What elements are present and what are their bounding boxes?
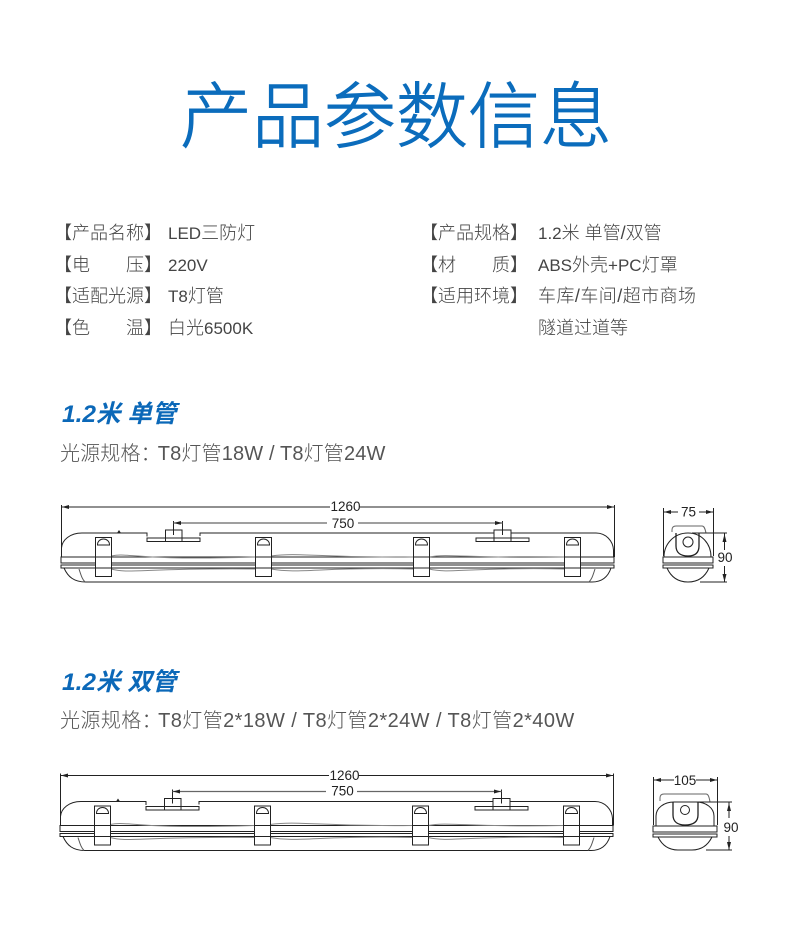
spec: environment continued: 隧道过道等 bbox=[538, 318, 628, 338]
text: double tube light source: 光源规格：T8灯管2*18W / T8灯管2*24W / T8灯管2*40W bbox=[60, 710, 575, 732]
spec: product size: 【产品规格】 1.2米 单管/双管 bbox=[420, 223, 662, 243]
heading: double tube: 1.2米 双管 bbox=[62, 669, 176, 696]
label: height 90: 90 bbox=[723, 820, 739, 835]
label: height 90: 90 bbox=[717, 550, 733, 565]
spec list: right column bbox=[420, 223, 697, 338]
label: mount spacing 750: 750 bbox=[331, 784, 354, 798]
title: 产品参数信息 bbox=[180, 78, 612, 158]
spec: environment: 【适用环境】 车库/车间/超市商场 bbox=[420, 286, 697, 306]
drawing: single tube front view bbox=[61, 499, 614, 582]
label: width 105: 105 bbox=[674, 773, 696, 788]
label: length 1260: 1260 bbox=[329, 768, 360, 783]
label: width 75: 75 bbox=[681, 504, 696, 520]
spec list: left column bbox=[54, 223, 255, 338]
text: single tube light source: 光源规格：T8灯管18W / T8灯管24W bbox=[60, 443, 386, 465]
heading: single tube: 1.2米 单管 bbox=[62, 401, 176, 428]
spec: voltage: 【电 压】 220V bbox=[54, 255, 208, 275]
label: length 1260: 1260 bbox=[330, 499, 361, 514]
spec: light source: 【适配光源】 T8灯管 bbox=[54, 286, 224, 306]
drawing: single tube end view bbox=[663, 504, 733, 582]
drawing: double tube front view bbox=[60, 768, 614, 850]
spec: product name: 【产品名称】 LED三防灯 bbox=[54, 223, 255, 243]
label: mount spacing 750: 750 bbox=[332, 516, 354, 531]
spec: colour temperature: 【色 温】 白光6500K bbox=[54, 318, 253, 338]
drawing: double tube end view bbox=[653, 773, 739, 850]
spec: material: 【材 质】 ABS外壳+PC灯罩 bbox=[420, 255, 678, 275]
